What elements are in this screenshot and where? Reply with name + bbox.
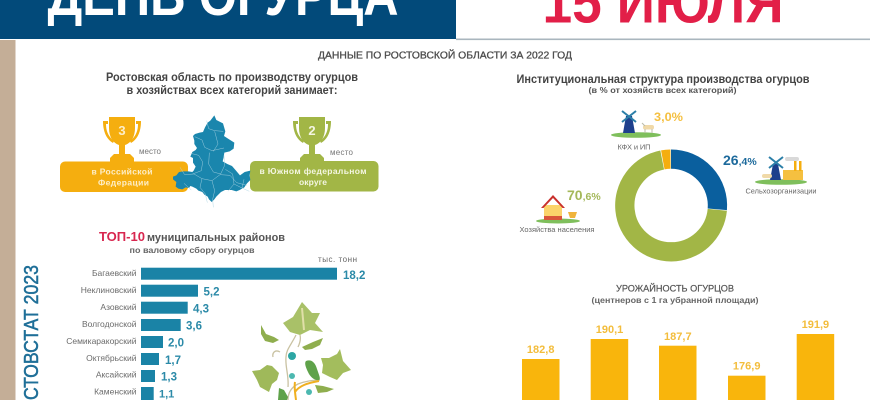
callout: households: 70,6% <box>567 187 601 203</box>
segment: agricultural organisations 26.4% <box>671 159 717 209</box>
heading: region rank <box>106 72 358 97</box>
bar 191,9: 191,9 <box>802 319 829 331</box>
side strip with source <box>0 40 43 400</box>
row: Октябрьский: Октябрьский <box>86 353 137 363</box>
illustration: cucumber plant <box>252 302 351 400</box>
heading: yield: УРОЖАЙНОСТЬ ОГУРЦОВ <box>616 282 734 294</box>
rank: Southern federal district <box>250 117 378 192</box>
heading: yield: (центнеров с 1 га убранной площади) <box>592 295 759 305</box>
icon: house and hen <box>536 195 580 224</box>
rank: Russian Federation: место <box>139 147 162 156</box>
icon: windmill and goat <box>611 111 661 138</box>
row: Каменский <box>94 386 174 400</box>
callout: households: Хозяйства населения <box>520 225 594 234</box>
bar 182,8: 182,8 <box>527 344 554 356</box>
side strip with source: СТОВСТАТ 2023 <box>21 265 43 400</box>
heading: top 10 districts: муниципальных районов <box>147 232 285 244</box>
bar 191,9 <box>797 319 834 400</box>
orange pill <box>60 162 188 192</box>
donut chart <box>625 159 717 252</box>
segment: households 70.6% <box>625 160 717 252</box>
heading: region rank: в хозяйствах всех категорий занимает: <box>126 85 338 97</box>
segment: KFH 3% <box>663 149 670 170</box>
row: Аксайский: 1,3 <box>161 372 177 384</box>
rank: Southern federal district: 2 <box>308 123 316 138</box>
row: Волгодонской: 3,6 <box>186 320 202 332</box>
bar 190,1 <box>591 324 628 400</box>
heading: structure: (в % от хозяйств всех категорий) <box>588 85 737 95</box>
row: Аксайский: Аксайский <box>96 370 137 380</box>
callout: households <box>520 187 601 234</box>
heading: yield <box>592 282 759 305</box>
row: Семикаракорский: Семикаракорский <box>66 336 137 346</box>
row: Аксайский <box>96 370 177 384</box>
row: Семикаракорский <box>66 336 184 350</box>
row: Семикаракорский: 2,0 <box>168 338 184 350</box>
row: Азовский <box>100 302 209 316</box>
green pill <box>250 161 378 192</box>
rank: Russian Federation <box>60 117 188 192</box>
subtitle: ДАННЫЕ ПО РОСТОВСКОЙ ОБЛАСТИ ЗА 2022 ГОД <box>318 48 572 62</box>
row: Азовский: 4,3 <box>193 304 209 316</box>
callout: agricultural organisations: 26,4% <box>723 152 757 168</box>
heading: top 10 districts: по валовому сбору огурцов <box>130 245 254 255</box>
rank: Russian Federation: 3 <box>118 123 126 138</box>
rank: Russian Federation: в Российской <box>92 166 152 176</box>
bar 176,9 <box>728 360 766 400</box>
row: Октябрьский <box>86 353 181 367</box>
row: Багаевский: Багаевский <box>92 268 137 278</box>
bar 187,7 <box>659 331 696 400</box>
rank: Southern federal district: округе <box>299 177 327 187</box>
row: Неклиновский: 5,2 <box>204 286 220 298</box>
row: Багаевский: 18,2 <box>343 270 365 282</box>
row: Неклиновский: Неклиновский <box>81 285 137 295</box>
callout: KFH and IP: КФХ и ИП <box>618 142 650 152</box>
bar 176,9: 176,9 <box>733 360 760 372</box>
row: Азовский: Азовский <box>100 302 137 312</box>
callout: agricultural organisations: Сельхозорганизации <box>746 186 816 196</box>
callout: agricultural organisations <box>723 152 816 196</box>
header banner: title <box>0 0 456 39</box>
row: Каменский: Каменский <box>94 386 137 396</box>
row: Волгодонской: Волгодонской <box>82 319 137 329</box>
row: Октябрьский: 1,7 <box>165 355 181 367</box>
icon: windmill and factory <box>755 157 807 185</box>
heading: region rank: Ростовская область по производству огурцов <box>106 72 358 84</box>
heading: structure: Институциональная структура производства огурцов <box>516 74 810 86</box>
callout: KFH and IP: 3,0% <box>654 112 683 124</box>
heading: top 10 districts <box>99 229 285 255</box>
rank: Russian Federation: Федерации <box>98 178 149 188</box>
callout: KFH and IP <box>611 111 683 152</box>
row: Неклиновский <box>81 285 220 298</box>
icon: orange trophy <box>103 117 141 162</box>
bar 182,8 <box>522 344 560 400</box>
rank: Southern federal district: место <box>330 148 354 157</box>
bar chart: yield by year <box>522 319 834 400</box>
heading: top 10 districts: ТОП-10 <box>99 229 145 244</box>
rank: Southern federal district: в Южном федеральном <box>260 166 366 176</box>
bar chart: top districts <box>66 268 365 400</box>
row: Багаевский <box>92 268 365 282</box>
bar 190,1: 190,1 <box>596 324 623 336</box>
bar 187,7: 187,7 <box>664 331 692 343</box>
unit label: тыс. тонн <box>318 255 357 264</box>
map of Rostov region <box>173 115 250 207</box>
row: Волгодонской <box>82 319 202 332</box>
icon: green trophy <box>293 117 331 162</box>
heading: structure <box>516 74 810 95</box>
